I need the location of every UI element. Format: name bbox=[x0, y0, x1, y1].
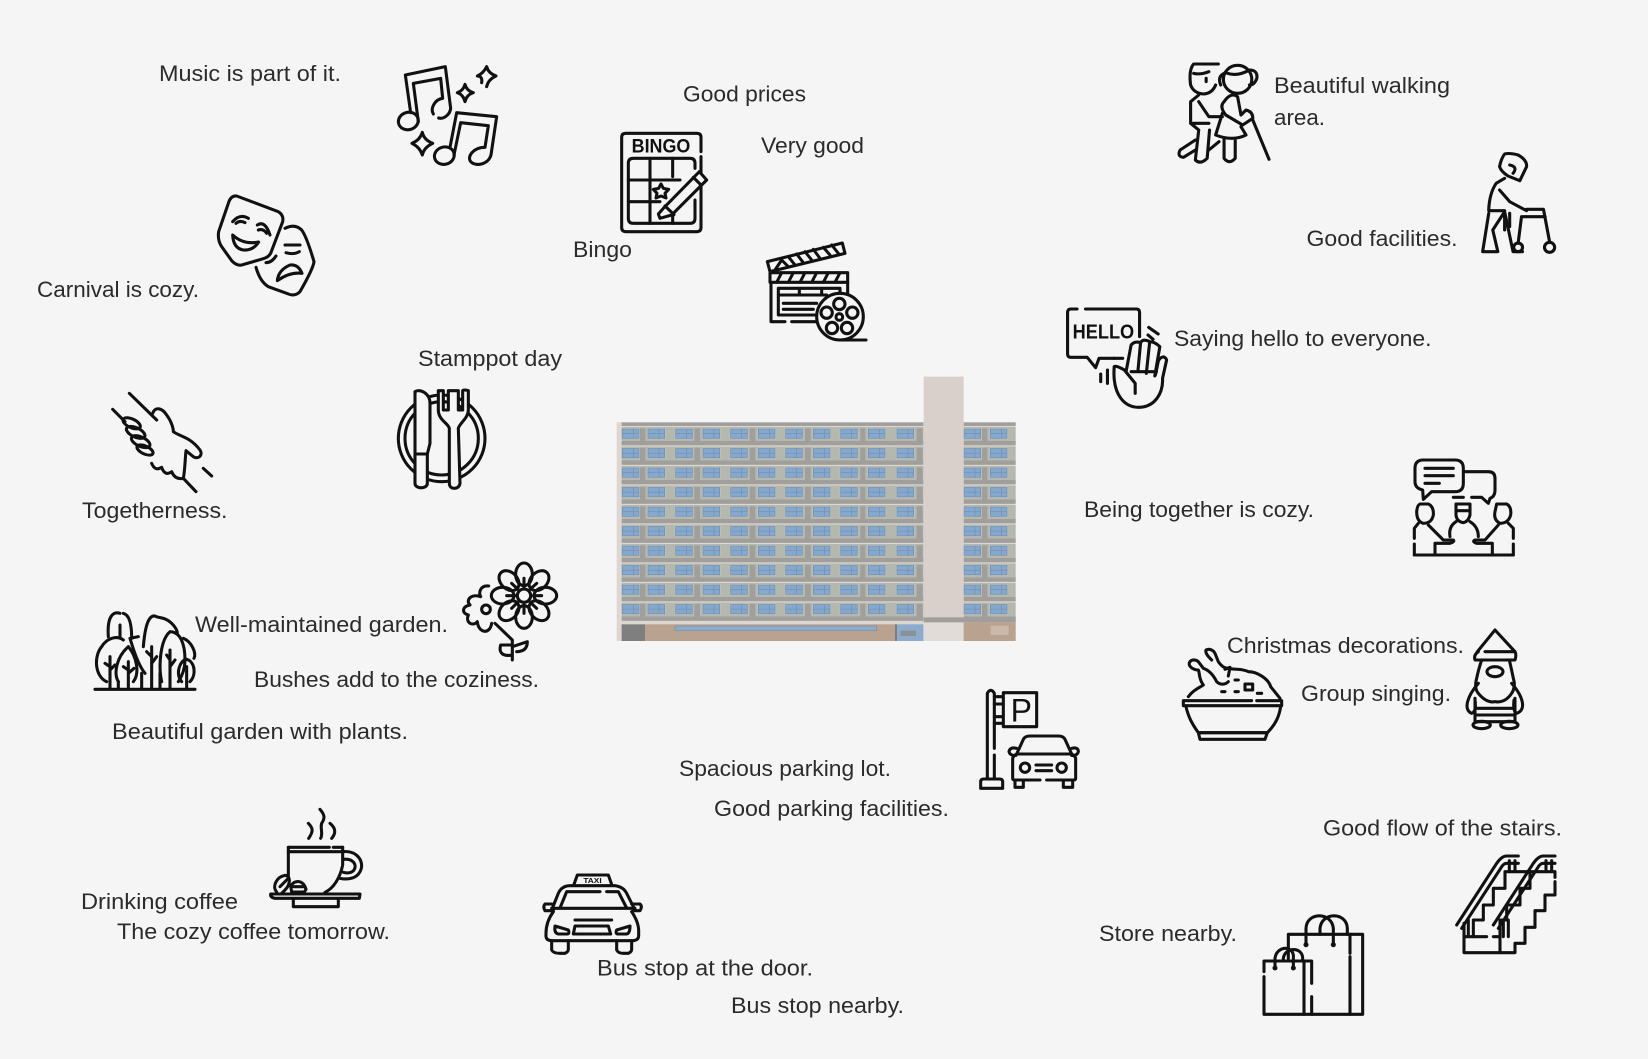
icon: garden gnome bbox=[1467, 630, 1523, 729]
icon: taxi bbox=[544, 875, 641, 953]
icon: parking sign and car: P bbox=[1011, 692, 1032, 728]
text: Very good: Very good bbox=[761, 133, 864, 158]
icon: hello speech bubble and waving hand bbox=[1068, 309, 1167, 407]
text: Bushes add to the coziness.: Bushes add to the coziness. bbox=[254, 667, 539, 692]
icon: people talking at a table bbox=[1414, 460, 1513, 555]
text: Togetherness.: Togetherness. bbox=[82, 498, 228, 523]
icon: trees and bushes bbox=[95, 613, 195, 689]
text: Group singing.: Group singing. bbox=[1301, 681, 1451, 706]
text: Stamppot day: Stamppot day bbox=[418, 346, 562, 371]
text: Bingo: Bingo bbox=[573, 237, 632, 262]
icon: shopping bags bbox=[1264, 916, 1363, 1014]
text: The cozy coffee tomorrow.: The cozy coffee tomorrow. bbox=[117, 919, 390, 944]
text: Good facilities.: Good facilities. bbox=[1306, 226, 1458, 251]
icon: flowers bbox=[464, 563, 557, 660]
text: Well-maintained garden.: Well-maintained garden. bbox=[195, 612, 448, 637]
text: Beautiful garden with plants.: Beautiful garden with plants. bbox=[112, 719, 408, 744]
icon: helping hands bbox=[113, 393, 212, 492]
icon: taxi: TAXI bbox=[583, 876, 602, 885]
text: Store nearby.: Store nearby. bbox=[1099, 921, 1237, 946]
text: Good prices: Good prices bbox=[683, 82, 806, 106]
text: Music is part of it.: Music is part of it. bbox=[159, 61, 341, 86]
icon: hello speech bubble and waving hand: HELLO bbox=[1073, 321, 1134, 344]
icon: elderly person with walker bbox=[1483, 154, 1555, 252]
icon: parking sign and car bbox=[981, 690, 1078, 788]
icon: music notes bbox=[396, 67, 497, 167]
text: Bus stop nearby.: Bus stop nearby. bbox=[731, 993, 904, 1018]
text: Good parking facilities.: Good parking facilities. bbox=[714, 796, 949, 821]
icon: holiday food bowl bbox=[1183, 649, 1282, 739]
icon: bingo card bbox=[622, 133, 707, 232]
text: Carnival is cozy.: Carnival is cozy. bbox=[37, 277, 199, 302]
text: Good flow of the stairs.: Good flow of the stairs. bbox=[1323, 816, 1562, 840]
illustration: apartment building bbox=[617, 377, 1016, 641]
icon: plate with knife and fork bbox=[398, 390, 485, 488]
text: Bus stop at the door.: Bus stop at the door. bbox=[597, 956, 813, 980]
icon: bingo card: BINGO bbox=[632, 136, 690, 157]
icon: theatre masks bbox=[218, 196, 314, 295]
icon: film clapperboard and reel bbox=[767, 243, 866, 340]
icon: elderly couple walking bbox=[1179, 64, 1269, 162]
text: Drinking coffee: Drinking coffee bbox=[81, 889, 238, 914]
text: Saying hello to everyone.: Saying hello to everyone. bbox=[1174, 326, 1432, 351]
icon: coffee cup with steam and beans bbox=[271, 809, 362, 907]
text: area.: area. bbox=[1274, 105, 1325, 130]
text: Spacious parking lot.: Spacious parking lot. bbox=[679, 756, 891, 781]
icon: stairs with railings bbox=[1457, 856, 1555, 953]
text: Beautiful walking: Beautiful walking bbox=[1274, 73, 1450, 98]
text: Christmas decorations.: Christmas decorations. bbox=[1227, 633, 1464, 658]
text: Being together is cozy.: Being together is cozy. bbox=[1084, 497, 1314, 522]
